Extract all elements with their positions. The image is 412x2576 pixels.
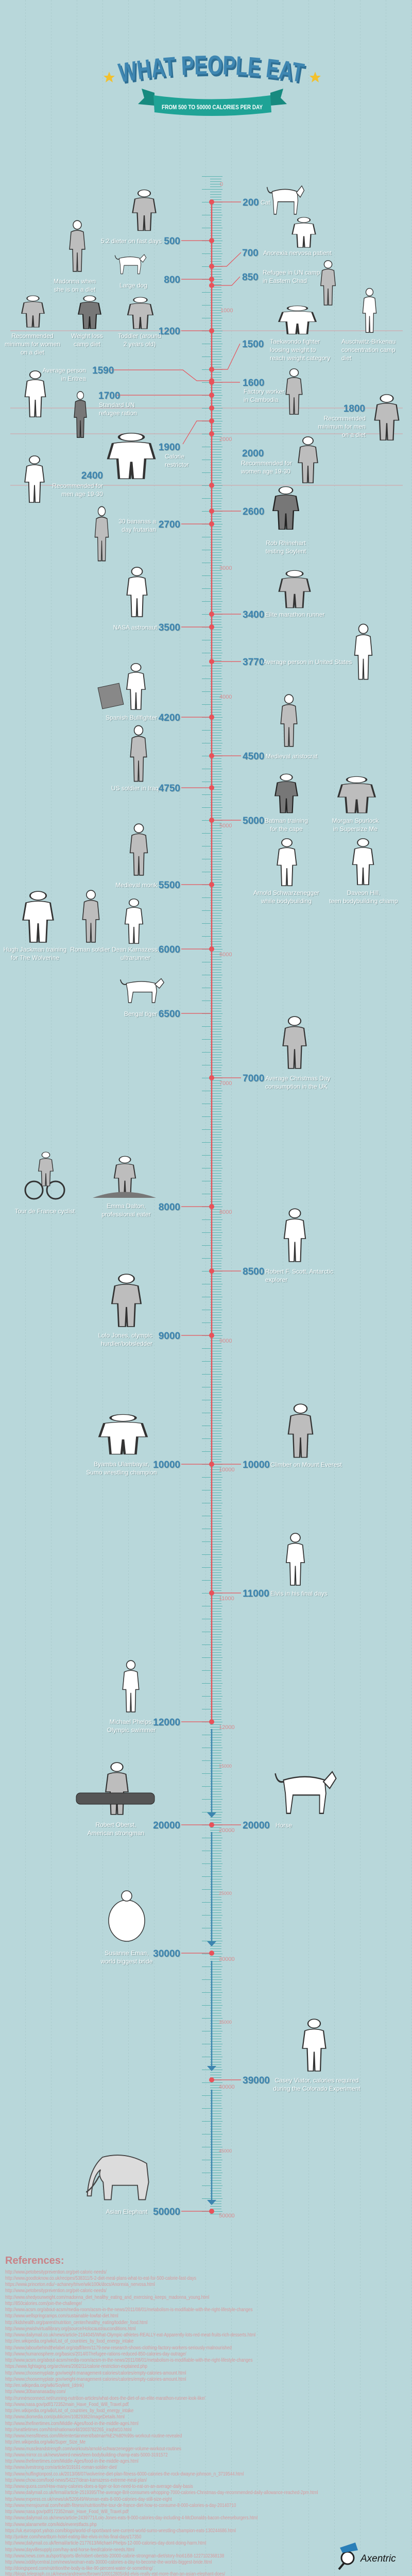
entry: 1800 men diet	[209, 395, 399, 440]
axis: scale ruler: 20000	[219, 1827, 235, 1834]
entry: 9000 lolo jones	[98, 1274, 214, 1347]
entry: 700 anorexia: Anorexia nervosa patient	[263, 249, 332, 257]
entry: 5500 monk: 5500	[159, 880, 180, 891]
entry: 9000 lolo jones: hurdler/bobsledder	[101, 1340, 152, 1347]
entry: 1700 UN ration: 1700	[98, 391, 120, 401]
axis: scale ruler: 2000	[219, 436, 232, 443]
entry: 7000 christmas: 7000	[243, 1073, 264, 1084]
entry: 1200: Weight loss	[71, 332, 103, 340]
entry: 3500 astronaut: 3500	[159, 622, 180, 633]
logo: Axentric	[339, 2543, 396, 2569]
entry: 11000 elvis: 11000	[243, 1588, 269, 1599]
entry: 30000 bride: world biggest bride	[100, 1958, 153, 1965]
references list: http://www.chow.com/food-news/54227/dean-karnazess-extreme-meal-plan/	[5, 2477, 147, 2483]
entry: 6000: Dean Karnazess,	[112, 946, 159, 953]
references list: http://doingspeed.com/nutrition/the-body-is-like-90-percent-water-or-something/	[5, 2565, 153, 2571]
entry: 500 dieter: 500	[164, 236, 180, 247]
subtitle ribbon: FROM 500 TO 50000 CALORIES PER DAY	[162, 104, 263, 111]
references list: http://www.livestrong.com/article/319101-roman-soldier-diet/	[5, 2464, 117, 2470]
title	[104, 56, 321, 83]
axis: scale ruler: 4000	[219, 694, 232, 700]
references list: http://www.petobesityprevention.org/pet-caloric-needs/	[5, 2287, 107, 2293]
references list	[5, 2269, 318, 2576]
references list: http://www.alanarnette.com/kids/everestfacts.php	[5, 2521, 97, 2527]
axis: scale ruler: 8000	[219, 1209, 232, 1215]
entry: 5000 batman, spurlock, arnold, daveon: Morgan Spurlock	[332, 817, 379, 824]
entry: 4200 bullfighter: 4200	[159, 713, 180, 723]
references list: http://www.quora.com/How-many-calories-does-a-tiger-or-lion-need-to-eat-on-an-average-daily-basis	[5, 2483, 193, 2489]
entry: 2700 frutarian	[95, 506, 214, 561]
entry: 1600 factory worker: 1600	[243, 378, 264, 388]
entry: 5000 batman, spurlock, arnold, daveon: teen bodybuilding champ	[329, 897, 398, 905]
entry: 4750 soldier: US soldier in Iraq	[111, 785, 159, 792]
icon: star right	[310, 72, 321, 82]
entry: 1700 UN ration	[74, 391, 214, 437]
entry: 200 cat	[209, 186, 304, 214]
entry: 3400 marathon: 3400	[243, 609, 264, 620]
axis: scale ruler: 40000	[219, 2084, 235, 2090]
entry: 1500: Auschwitz-Birkenau	[341, 338, 396, 345]
entry: 12000 phelps: Olympic swimmer	[107, 1726, 156, 1734]
entry: 10000 sumo and climber: 10000	[243, 1460, 270, 1470]
entry: 500 dieter	[101, 190, 214, 247]
entry: 1200: camp diet	[74, 341, 101, 348]
references list: http://en.wikipedia.org/wiki/List_of_countries_by_food_energy_intake	[5, 2408, 133, 2413]
references list: http://www.nasa.gov/pdf/172352main_Have_Food_Will_Travel.pdf	[5, 2401, 129, 2407]
entry: 2700 frutarian: 2700	[159, 519, 180, 530]
entry: 20000 oberst and horse: 20000	[153, 1820, 180, 1831]
entry: 200 cat: Cat	[261, 199, 270, 206]
entry: 9000 lolo jones: Lolo Jones, olympic	[98, 1332, 152, 1339]
entry: 2600 Rob Rhinehart: Rob Rhinehart	[266, 539, 306, 547]
references list: http://www.huffingtonpost.co.uk/2013/08/07/wolverine-diet-plan-fitness-6000-calories-the-rock-dwayne-johnson_n_3719544.html	[5, 2471, 244, 2477]
entry: 8000: Emma Dalton,	[107, 1202, 146, 1210]
entry: 8000: professional eater	[101, 1211, 151, 1218]
references list: http://www.30bananasaday.com/	[5, 2388, 66, 2394]
entry: 1200	[5, 296, 214, 356]
entry: 5000 batman, spurlock, arnold, daveon: 5000	[243, 816, 264, 826]
entry: 1600 factory worker: in Cambodia	[244, 396, 279, 403]
entry: 7000 christmas: consumption in the UK	[265, 1083, 328, 1090]
entry: 1590 eritrea	[25, 365, 214, 417]
references list: http://runnersconnect.net/running-nutrition-articles/what-does-the-diet-of-an-elite-marathon-runner-look-like/	[5, 2395, 205, 2401]
entry: 10000 sumo and climber: Sumo wrestling champion	[86, 1469, 157, 1476]
references list: http://www.muscleandstrength.com/workouts/arnold-schwarzenegger-volume-workout-routines	[5, 2446, 181, 2451]
entry: 1590 eritrea: in Eritrea	[61, 375, 86, 382]
entry: 1500: Taekwondo fighter	[270, 338, 320, 345]
entry: 2400 men: men age 19-30	[61, 490, 103, 498]
entry: 30000 bride: Susanne Eman,	[105, 1950, 149, 1957]
references list: http://www.news.com.au/sport/sports-life/robert-obersts-20000-calorie-strongman-diet/story-fno61i58-1227102368138	[5, 2553, 224, 2558]
axis: scale ruler: 25000	[219, 1891, 232, 1896]
entry: 700 anorexia	[209, 217, 332, 269]
entry: 1200: Recommended	[11, 332, 54, 340]
references list: http://www.petobesityprevention.org/pet-caloric-needs/	[5, 2269, 107, 2275]
axis: scale ruler: 9000	[219, 1338, 232, 1344]
entry: 4750 soldier: 4750	[159, 783, 180, 794]
entry: 8500 scott	[209, 1209, 333, 1283]
entry: 5500 monk	[115, 824, 214, 891]
entry: 1200: 1200	[159, 326, 180, 337]
entry: 5000 batman, spurlock, arnold, daveon	[209, 774, 398, 905]
axis: scale ruler: 35000	[219, 2020, 232, 2025]
entry: 2000 women: Recommended for	[241, 460, 292, 467]
entry: 8000: 8000	[159, 1202, 180, 1213]
entry: 3400 marathon: Elite marathon runner	[265, 611, 324, 618]
entry: 200 cat: 200	[243, 197, 259, 208]
entry: 6000: for The Wolverine	[11, 954, 59, 961]
entry: 850 refugee	[209, 261, 335, 305]
references list: http://www.choosemyplate.gov/weight-management-calories/calories/empty-calories-amount.html	[5, 2376, 186, 2382]
entry: 1900 calorie restrictor: restrictor	[165, 461, 189, 468]
entry: 1500: reach weight category	[270, 354, 330, 362]
entry: 2700 frutarian: 30 bananas a	[118, 518, 156, 525]
entry: 5000 batman, spurlock, arnold, daveon: Arnold Schwarzenegger	[253, 889, 319, 896]
entry: 3500 astronaut	[113, 567, 214, 633]
entry: 39000 casey viator: 39000	[243, 2075, 270, 2086]
entry: 1200: Toddler (around	[118, 332, 161, 340]
entry: 2600 Rob Rhinehart: testing Soylent	[266, 548, 306, 555]
entry: 2000 women: 2000	[242, 448, 264, 459]
entry: 10000 sumo and climber: 10000	[153, 1460, 180, 1470]
entry: 1900 calorie restrictor	[108, 418, 214, 479]
entry: 7000 christmas: Average Christmas Day	[265, 1075, 331, 1082]
entry: 6500 tiger	[121, 978, 212, 1020]
entry: 1700 UN ration: refugee ration	[99, 410, 137, 417]
entry: 850 refugee: 850	[242, 272, 259, 283]
entry: 11000 elvis: Elvis in his final days	[270, 1590, 328, 1597]
entry: 10000 sumo and climber: Climber on Mount Everest	[270, 1461, 342, 1468]
entry: 6500 tiger: 6500	[159, 1009, 180, 1020]
entry: 8500 scott: explorer	[265, 1276, 287, 1283]
references list: https://www.princeton.edu/~achaney/tmve/wiki100k/docs/Anorexia_nervosa.html	[5, 2281, 155, 2287]
entry: 800 madonna, dog: Madonna when	[54, 278, 96, 285]
title: WHAT PEOPLE EAT	[117, 56, 305, 81]
entry: 1500: diet	[341, 354, 352, 362]
logo: Axentric: Axentric	[360, 2553, 396, 2564]
entry: 10000 sumo and climber	[86, 1404, 342, 1476]
entry: 850 refugee: in Eastern Chad	[263, 277, 307, 284]
entry: 20000 oberst and horse	[76, 1762, 336, 1837]
references list: http://www.mensfitness.com/life/entertainment/batman%E2%80%99s-workout-routine-revealed	[5, 2433, 182, 2438]
entry: 2400 men	[25, 456, 214, 502]
references list: http://www.odditycentral.com/news/woman-eats-30000-calories-a-day-to-become-the-worlds-biggest-bride.html	[5, 2559, 212, 2565]
entry: 12000 phelps: 12000	[153, 1717, 180, 1728]
entry: 39000 casey viator	[209, 2019, 360, 2092]
references list: http://www.dailymail.co.uk/news/article-2439771/Lolo-Jones-eats-9-000-calories-day-including-4-McDonalds-bacon-cheeseburgers.html	[5, 2515, 258, 2520]
references list: http://www.goodtoknow.co.uk/recipes/538311/5-2-diet-meal-plans-what-to-eat-for-500-calorie-fast-days	[5, 2275, 196, 2281]
entry: 3400 marathon	[209, 570, 324, 620]
axis: scale ruler: 1000	[220, 308, 233, 314]
entry: 800 madonna, dog: Large dog	[119, 282, 147, 289]
entry: 12000 phelps: Michael Phelps,	[110, 1718, 153, 1725]
axis: scale ruler: 30000	[219, 1956, 235, 1962]
entry: 2600 Rob Rhinehart	[209, 487, 306, 555]
axis: scale ruler	[202, 176, 235, 2219]
entry: 3770 US average: 3770	[243, 657, 264, 668]
entry: 2700 frutarian: day frutarian	[122, 526, 156, 533]
references list: http://kidshealth.org/parent/nutrition_center/healthy_eating/toddler_food.html	[5, 2319, 148, 2325]
entry: 6000: Roman soldier	[70, 946, 110, 953]
entry: 2600 Rob Rhinehart: 2600	[243, 506, 264, 517]
entry: 5000 batman, spurlock, arnold, daveon: while bodybuilding	[261, 897, 312, 905]
entry: 1500: loosing weight to	[270, 346, 316, 353]
references list: http://www.express.co.uk/news/uk/520649/Woman-eats-8-000-calories-day-still-size-eight	[5, 2496, 172, 2502]
entry: 20000 oberst and horse: Horse	[276, 1822, 292, 1829]
references list: http://www.acsm.org/about-acsm/media-room/acsm-in-the-news/2011/08/01/metabolism-is-modifiable-with-the-right-lifestyle-changes	[5, 2307, 253, 2312]
references list: http://www.jewishvirtuallibrary.org/jsource/Holocaust/auconditions.html	[5, 2326, 136, 2331]
references list: https://www.fightaging.org/archives/2002/11/calorie-restriction-explained.php	[5, 2363, 147, 2369]
references list: http://seattletimes.com/html/nationworld/2003782265_iraqfat10.html	[5, 2427, 132, 2432]
entry: 7000 christmas	[209, 1016, 331, 1090]
entry: 8500 scott: Robert F. Scott, Antarctic	[265, 1268, 333, 1275]
entry: 6000: ultrarunner	[121, 954, 150, 961]
entry: 4200 bullfighter	[98, 664, 214, 723]
entry: 800 madonna, dog: 800	[164, 275, 180, 285]
axis: scale ruler: 12000	[219, 1724, 235, 1731]
axis: scale ruler: 5000	[219, 823, 232, 829]
entry: 1500	[209, 289, 396, 372]
references list: http://en.wikipedia.org/wiki/Soylent_(drink)	[5, 2382, 84, 2388]
entry: 1600 factory worker	[209, 369, 302, 414]
references heading: References:	[5, 2255, 64, 2266]
references list: http://850calories.com/join-the-challenge/	[5, 2300, 82, 2306]
entry: 4750 soldier	[111, 725, 214, 794]
entry: 800 madonna, dog	[54, 221, 214, 293]
references list: http://www.humanosphere.org/basics/2014/07/refugee-rations-reduced-850-calories-day-outrage/	[5, 2351, 186, 2357]
references list: http://www.thefinertimes.com/Middle-Ages/food-in-the-middle-ages.html	[5, 2458, 139, 2464]
entry: 1200: 2 years old)	[124, 341, 156, 348]
entry: 1500: concentration camp	[341, 346, 396, 353]
title: WHAT PEOPLE EAT	[121, 58, 306, 83]
entry: 11000 elvis	[209, 1533, 328, 1599]
entry: 4200 bullfighter: Spanish Bullfighter	[106, 714, 157, 721]
entry: 3770 US average: Average person in United States	[263, 658, 352, 666]
entry: 8500 scott: 8500	[243, 1266, 264, 1277]
entry: 1900 calorie restrictor: Calorie	[165, 453, 184, 460]
entry: 20000 oberst and horse: Robert Oberst,	[96, 1821, 136, 1828]
references list: http://en.wikipedia.org/wiki/Super_Size_Me	[5, 2439, 85, 2445]
entry: 50000 elephant	[86, 2155, 214, 2217]
entry: 1590 eritrea: Average person	[42, 367, 86, 374]
entry: 6500 tiger: Bengal tiger	[124, 1010, 157, 1018]
entry: 6000	[4, 890, 214, 961]
entry: 10000 sumo and climber: Byamba Ulambayar,	[94, 1461, 149, 1468]
entry: 8000	[15, 1152, 214, 1218]
entry: 6000: Hugh Jackman training	[4, 946, 66, 953]
entry: 2000 women	[209, 431, 318, 483]
references list: http://www.wellspringcamps.com/sustainable-lowfat-diet.html	[5, 2313, 118, 2318]
entry: 5000 batman, spurlock, arnold, daveon: in Supersize Me	[333, 825, 377, 833]
entry: 4500 aristocrat: Medieval aristocrat	[266, 753, 318, 760]
icon: star left	[104, 72, 115, 82]
references list: http://www.labourbehindthelabel.org/staff/item/1179-new-research-shows-clothing-factory-workers-seriously-malnourished	[5, 2345, 232, 2350]
references list: https://uk.eurosport.yahoo.com/blogs/world-of-sport/want-see-current-world-sumo-wrestling-champion-eats-130244686.html	[5, 2528, 236, 2533]
entry: 1800 men diet: on a diet	[342, 431, 366, 438]
entry: 2400 men: Recommended for	[52, 482, 103, 489]
axis: scale ruler: 7000	[219, 1080, 232, 1087]
entry: 5000 batman, spurlock, arnold, daveon: Daveon Hill,	[347, 889, 380, 896]
entry: 5500 monk: Medieval monk	[115, 882, 158, 889]
entry: 50000 elephant: 50000	[153, 2207, 180, 2217]
references list: http://junkee.com/heartburn-hotel-eating-like-elvis-in-his-final-days/17350	[5, 2534, 141, 2539]
entry: 1700 UN ration: Standard UN	[99, 401, 134, 409]
subtitle ribbon	[138, 89, 287, 116]
entry: 30000 bride	[100, 1891, 214, 1965]
entry: 2400 men: 2400	[81, 470, 103, 481]
references list: http://www.dailymail.co.uk/femail/article-2519395/The-average-Brit-consumes-whopping-7000-calories-Christmas-day-recommended-daily-allowance-reached-2pm.html	[5, 2489, 318, 2495]
entry: 4500 aristocrat: 4500	[243, 751, 264, 762]
entry: 1800 men diet: minimum for men	[318, 423, 366, 430]
entry: 1200: minimum for women	[5, 341, 60, 348]
axis: scale ruler: 0	[220, 181, 223, 188]
entry: 700 anorexia: 700	[242, 248, 259, 259]
references list: http://www.dailymail.co.uk/femail/article-2177613/Michael-Phelps-12-000-calories-day-dont-doing-harm.html	[5, 2540, 206, 2546]
entry: 20000 oberst and horse: 20000	[243, 1820, 270, 1831]
axis: scale ruler: 11000	[219, 1596, 234, 1602]
entry: 1200: on a diet	[21, 349, 45, 356]
references list: http://www.thefinertimes.com/Middle-Ages/food-in-the-middle-ages.html	[5, 2420, 139, 2426]
entry: 39000 casey viator: Casey Viator, calories required	[274, 2077, 359, 2084]
references list: http://en.wikipedia.org/wiki/List_of_countries_by_food_energy_intake	[5, 2338, 133, 2344]
entry: 39000 casey viator: during the Colorado Experiment	[273, 2085, 360, 2092]
entry: 30000 bride: 30000	[153, 1948, 180, 1959]
axis: scale ruler: 10000	[219, 1467, 235, 1473]
entry: 1800 men diet: Recommended	[324, 415, 366, 422]
entry: 3500 astronaut: NASA astronaut	[113, 624, 158, 631]
axis: scale ruler: 15000	[219, 1764, 232, 1769]
entry: 800 madonna, dog: she is on a diet	[54, 286, 96, 293]
references list: http://www.shedyourweight.com/madonna_diet_healthy_eating_and_exercising_keeps_madonna_young.html	[5, 2294, 209, 2300]
entry: 5000 batman, spurlock, arnold, daveon: Batman training	[265, 817, 308, 824]
entry: 3770 US average	[209, 624, 372, 680]
references list: http://www.dailymail.co.uk/news/article-2164045/What-Olympic-athletes-REALLY-eat-Apparently-lots-red-meat-fruits-rich-desserts.html	[5, 2332, 255, 2337]
axis: scale ruler: 6000	[219, 952, 232, 958]
references list: http://www.nasa.gov/pdf/172352main_Have_Food_Will_Travel.pdf	[5, 2509, 129, 2514]
entry: 12000 phelps	[107, 1660, 214, 1734]
axis: scale ruler: 45000	[219, 2148, 232, 2154]
entry: 1900 calorie restrictor: 1900	[159, 442, 180, 453]
references list: http://www.mensjournal.com/health-fitness/nutrition/the-tour-de-france-diet-how-to-consume-8-000-calories-a-day-20140710	[5, 2502, 236, 2508]
references list: http://www.choosemyplate.gov/weight-management-calories/calories/empty-calories-amount.html	[5, 2370, 186, 2376]
entry: 2000 women: women age 19-30	[241, 468, 290, 475]
entry: 850 refugee: Refugee in UN camp	[263, 269, 320, 276]
entry: 9000 lolo jones: 9000	[159, 1331, 180, 1342]
axis: scale ruler: 3000	[219, 565, 232, 571]
entry: 20000 oberst and horse: American strongman	[88, 1829, 144, 1837]
entry: 6000: 6000	[159, 944, 180, 955]
entry: 1600 factory worker: Factory worker	[244, 388, 284, 395]
entry: 1590 eritrea: 1590	[92, 365, 114, 376]
entry: 4500 aristocrat	[209, 694, 318, 762]
entry: 500 dieter: 5:2 dieter on fast days	[101, 238, 162, 245]
references list: http://www.mirror.co.uk/news/weird-news/teen-bodybuilding-champ-eats-5000-3191572	[5, 2452, 168, 2458]
entry: 5000 batman, spurlock, arnold, daveon: for the cape	[270, 825, 303, 833]
entry: 8000: Tour de France cyclist	[15, 1208, 75, 1215]
horizontal guide lines	[10, 331, 403, 485]
references list: http://www.acsm.org/about-acsm/media-room/acsm-in-the-news/2011/08/01/metabolism-is-modifiable-with-the-right-lifestyle-changes	[5, 2357, 253, 2363]
references list: http://www.dayvillesupply.com/hay-and-horse-feed/calorie-needs.html	[5, 2547, 134, 2552]
entry: 1500: 1500	[242, 339, 264, 350]
axis: scale ruler: 50000	[219, 2213, 235, 2219]
references list: http://www.diomedia.com/public/en/10829382/imageDetails.html	[5, 2414, 125, 2419]
entry: 50000 elephant: Asian Elephant	[106, 2208, 148, 2215]
entry: 1800 men diet: 1800	[344, 403, 365, 414]
